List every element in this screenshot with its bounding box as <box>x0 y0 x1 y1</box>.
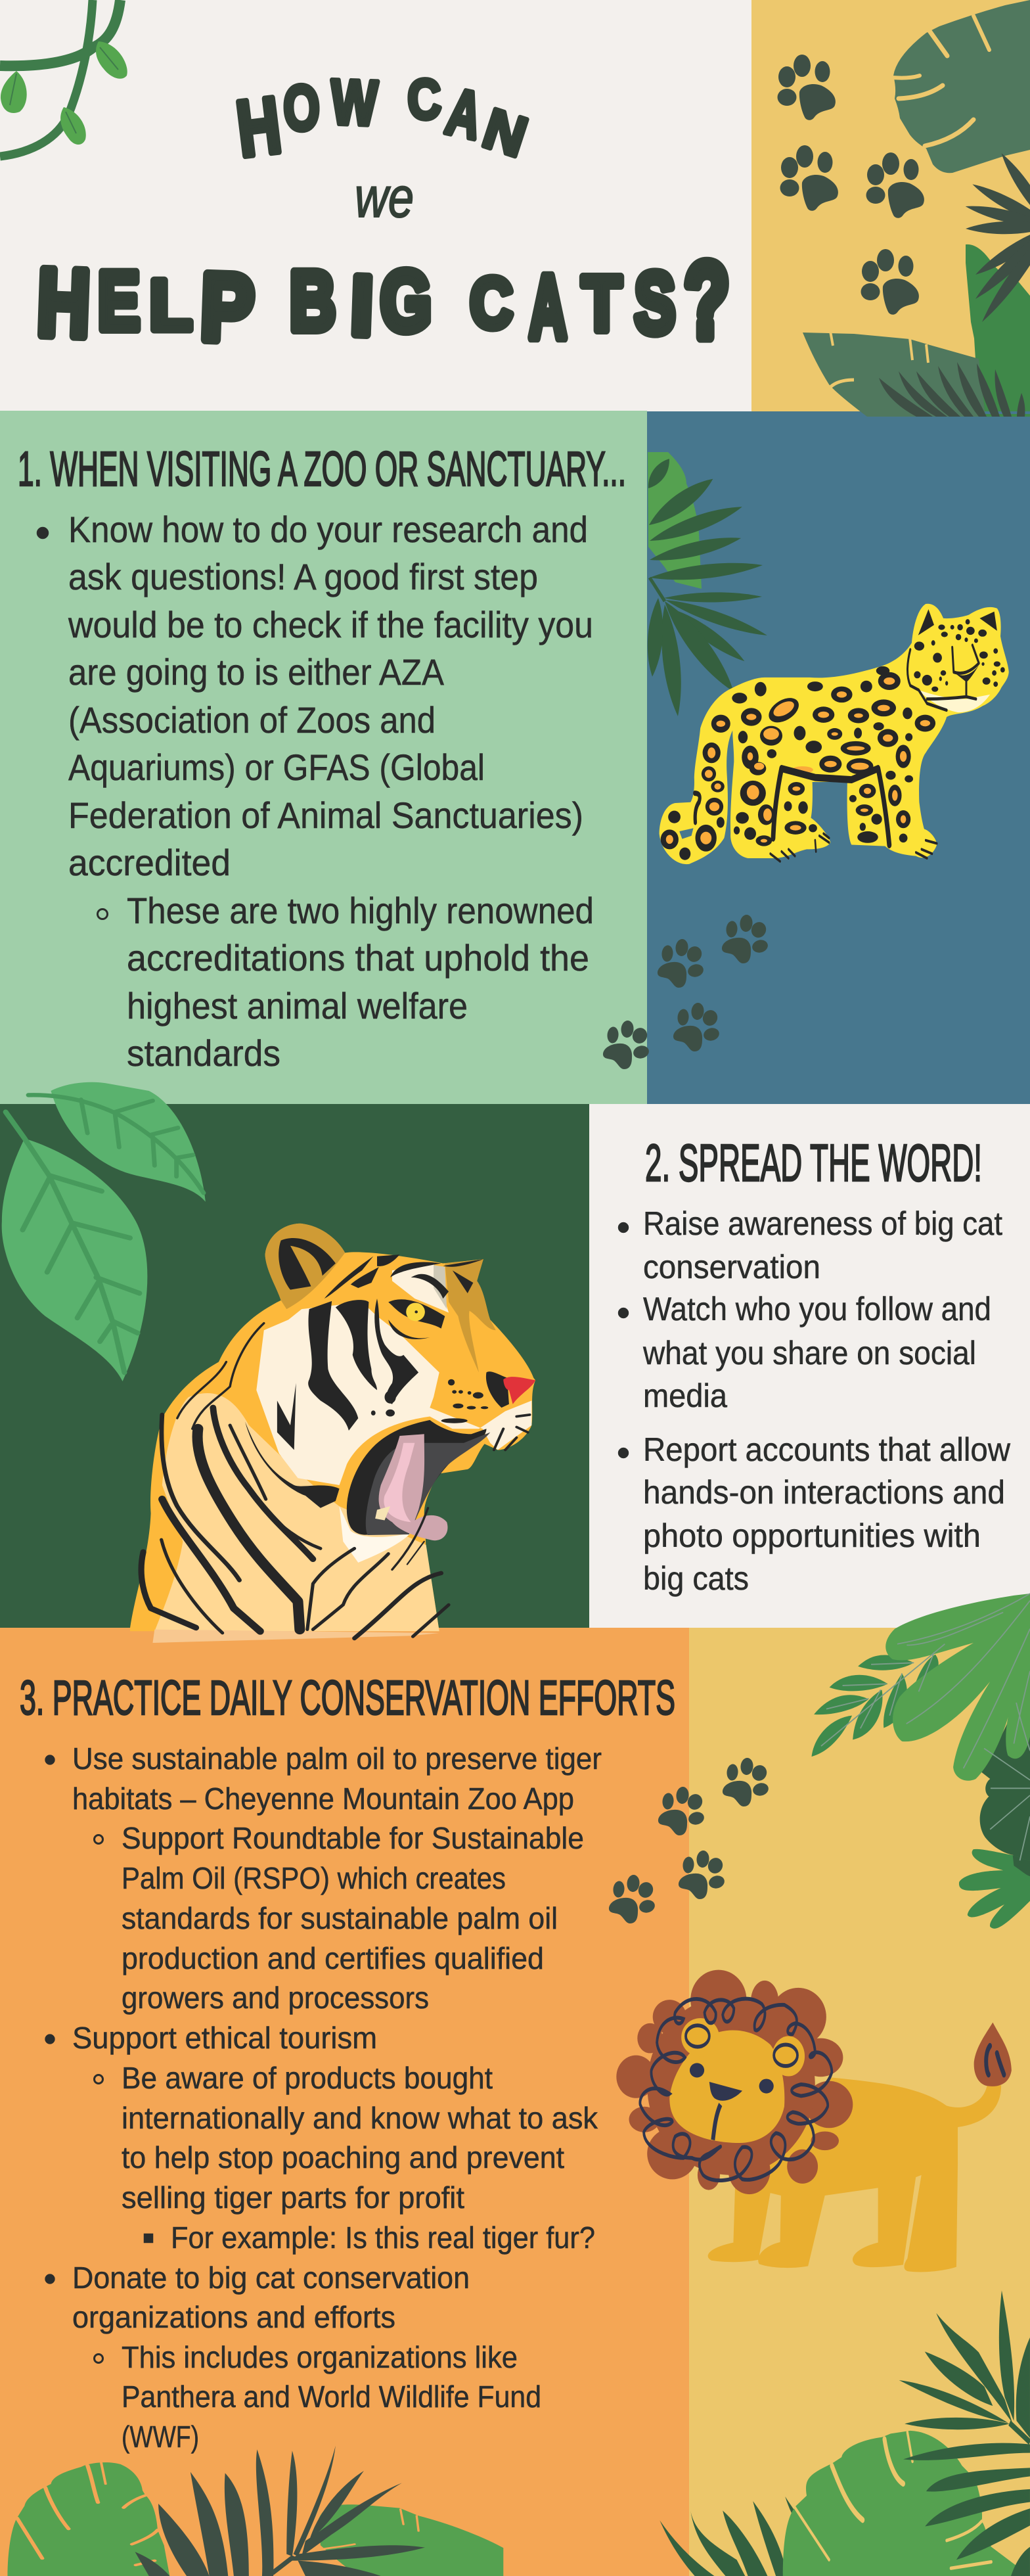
title line: help big cats: P <box>199 254 256 361</box>
title line: help big cats: C <box>470 264 512 343</box>
icon: section 1 palm and leaf <box>643 452 769 717</box>
text block: section 3 list: growers and processors <box>122 1981 429 2015</box>
text block: section 1 list: standards <box>127 1032 280 1074</box>
text block: section 2 list <box>618 1205 1011 1597</box>
icon: hanging vine <box>0 0 127 156</box>
text block: section 1 list: (Association of Zoos and <box>68 699 436 741</box>
heading: section 1: 1. WHEN VISITING A ZOO OR SANCTUARY... <box>18 442 626 496</box>
title line: how can: W <box>330 67 379 139</box>
title line: how can: A <box>441 75 488 153</box>
illustration: tiger <box>130 1224 535 1643</box>
title line: how can: O <box>282 72 321 145</box>
text block: section 3 list: Donate to big cat conservation <box>72 2261 470 2295</box>
panel: section 3 background <box>0 1628 1030 2576</box>
text block: section 3 list <box>45 1741 602 2454</box>
icon: header paw prints <box>778 55 924 315</box>
text block: section 1 list: accredited <box>68 842 231 883</box>
title line: help big cats: ? <box>684 241 729 360</box>
text block: section 1 list: highest animal welfare <box>127 985 468 1026</box>
title line: help big cats <box>35 241 729 361</box>
text block: section 1 list <box>37 509 594 1074</box>
text block: section 3 list: Support Roundtable for Sustainable <box>122 1821 584 1855</box>
text block: section 2 list: what you share on social <box>642 1335 976 1371</box>
text block: section 3 list: to help stop poaching and prevent <box>122 2140 564 2174</box>
text block: section 1 list: would be to check if the facility you <box>68 604 593 645</box>
title line: help big cats: H <box>35 250 91 357</box>
panel: header background <box>0 0 1030 411</box>
text block: section 3 list: standards for sustainable palm oil <box>122 1901 558 1935</box>
title line: help big cats: A <box>529 256 567 357</box>
title line: help big cats: T <box>582 260 621 347</box>
text block: section 3 list: selling tiger parts for profit <box>122 2180 464 2215</box>
text block: section 3 list: Support ethical tourism <box>72 2021 377 2055</box>
text block: section 3 list: This includes organizations like <box>122 2340 518 2374</box>
text block: section 2 list: big cats <box>643 1560 749 1597</box>
text block: section 2 list: media <box>643 1377 727 1414</box>
title line: help big cats: B <box>290 254 336 348</box>
title line: how can <box>233 67 534 173</box>
text block: section 3 list: (WWF) <box>122 2420 199 2454</box>
text block: section 1 list: Know how to do your research and <box>68 509 588 550</box>
text block: section 3 list: organizations and efforts <box>72 2300 395 2334</box>
title line: help big cats: S <box>635 255 675 352</box>
title: how can we help big cats <box>35 67 729 361</box>
title line: help big cats: I <box>349 259 374 353</box>
icon: section 3 paw prints <box>609 1757 770 1923</box>
text block: section 3 list: Use sustainable palm oil to preserve tiger <box>72 1741 602 1776</box>
text block: section 2 list: Raise awareness of big cat <box>643 1205 1002 1242</box>
title word: we: we <box>355 166 414 229</box>
text block: section 2 list: Report accounts that allow <box>643 1431 1011 1468</box>
title line: help big cats: G <box>380 253 432 349</box>
illustration: lion <box>616 1970 1012 2272</box>
icon: bottom right foliage <box>660 2290 1030 2576</box>
text block: section 1 list: accreditations that uphold the <box>127 937 589 978</box>
title line: help big cats: L <box>150 265 192 345</box>
icon: section 3 upper right foliage <box>811 1594 1030 1929</box>
text block: section 3 list: habitats – Cheyenne Mountain Zoo App <box>72 1782 574 1816</box>
panel: section 2 background <box>0 1104 1030 1628</box>
illustration: leopard <box>660 604 1009 864</box>
title line: how can: N <box>476 97 534 170</box>
icon: bottom left foliage <box>7 2446 503 2576</box>
text block: section 3 list: For example: Is this real tiger fur? <box>171 2220 595 2255</box>
text block: section 3 list: internationally and know what to ask <box>122 2101 598 2135</box>
text block: section 2 list: conservation <box>643 1249 820 1285</box>
icon: header foliage <box>803 0 1030 417</box>
text block: section 3 list: Palm Oil (RSPO) which creates <box>122 1861 506 1895</box>
text block: section 1 list: Federation of Animal Sanctuaries) <box>68 794 583 836</box>
title line: help big cats: E <box>98 255 140 347</box>
title line: how can: H <box>233 81 285 173</box>
panel: section 1 background <box>0 411 1030 1104</box>
text block: section 2 list: photo opportunities with <box>643 1517 981 1554</box>
text block: section 2 list: hands-on interactions and <box>643 1474 1005 1511</box>
text block: section 1 list: These are two highly renowned <box>127 890 594 931</box>
text block: section 2 list: Watch who you follow and <box>643 1291 991 1327</box>
text block: section 1 list: ask questions! A good first step <box>68 556 538 597</box>
icon: section 1 paw prints <box>603 914 769 1069</box>
title line: how can: C <box>407 67 442 131</box>
text block: section 1 list: are going to is either AZA <box>68 651 445 693</box>
text block: section 3 list: production and certifies qualified <box>122 1941 544 1975</box>
text block: section 3 list: Be aware of products bought <box>122 2061 493 2095</box>
text block: section 3 list: Panthera and World Wildlife Fund <box>122 2380 541 2414</box>
icon: tiger section leaves <box>2 1082 206 1381</box>
text block: section 1 list: Aquariums) or GFAS (Global <box>68 747 485 788</box>
